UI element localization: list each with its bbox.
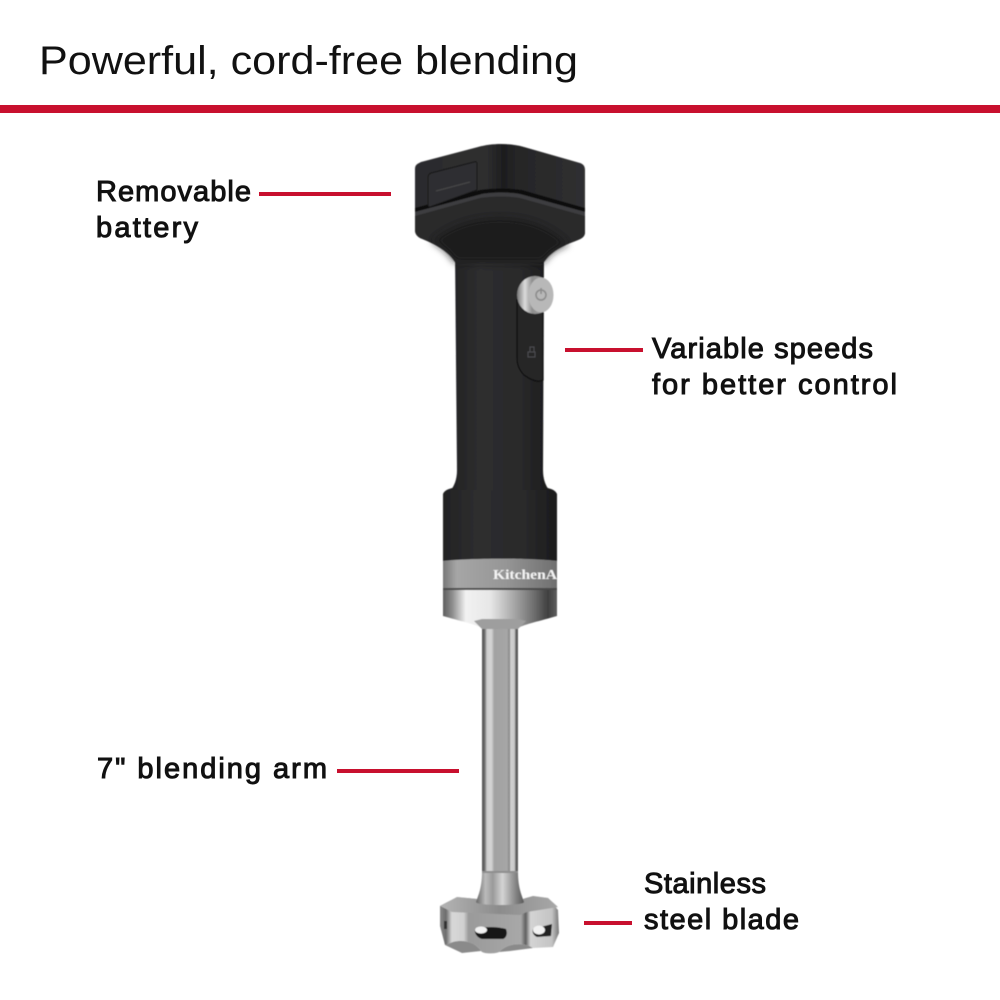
- power button: [517, 276, 554, 314]
- battery latch: [428, 162, 477, 207]
- callout: stainless steel blade: Stainless: [644, 868, 766, 900]
- callout: blending arm: 7" blending arm: [97, 753, 327, 785]
- callout: removable battery: [96, 176, 391, 244]
- blade flare: [476, 872, 524, 905]
- callout: variable speeds: [565, 333, 897, 401]
- battery head: [415, 144, 585, 262]
- title: Powerful, cord-free blending: [39, 39, 578, 83]
- callout: variable speeds: for better control: [652, 369, 897, 401]
- product: hand blender: [415, 144, 585, 953]
- callout: blending arm: [97, 753, 459, 785]
- callout: removable battery: battery: [96, 212, 198, 244]
- blade guard: [440, 871, 559, 953]
- callout: removable battery: Removable: [96, 176, 251, 208]
- handle: [451, 250, 549, 490]
- blending arm shaft: [482, 622, 518, 874]
- grey band with brand: [443, 559, 557, 590]
- speed slider: [517, 300, 543, 381]
- header rule: [0, 105, 1000, 113]
- callout: stainless steel blade: [584, 868, 799, 936]
- grey band with brand: KitchenA: [493, 567, 557, 582]
- head lower shade: [415, 196, 585, 262]
- callout: variable speeds: Variable speeds: [652, 333, 873, 365]
- motor collar: [443, 486, 557, 561]
- chrome collar: [443, 590, 557, 628]
- blade slots: [444, 921, 552, 939]
- callout: stainless steel blade: steel blade: [644, 904, 799, 936]
